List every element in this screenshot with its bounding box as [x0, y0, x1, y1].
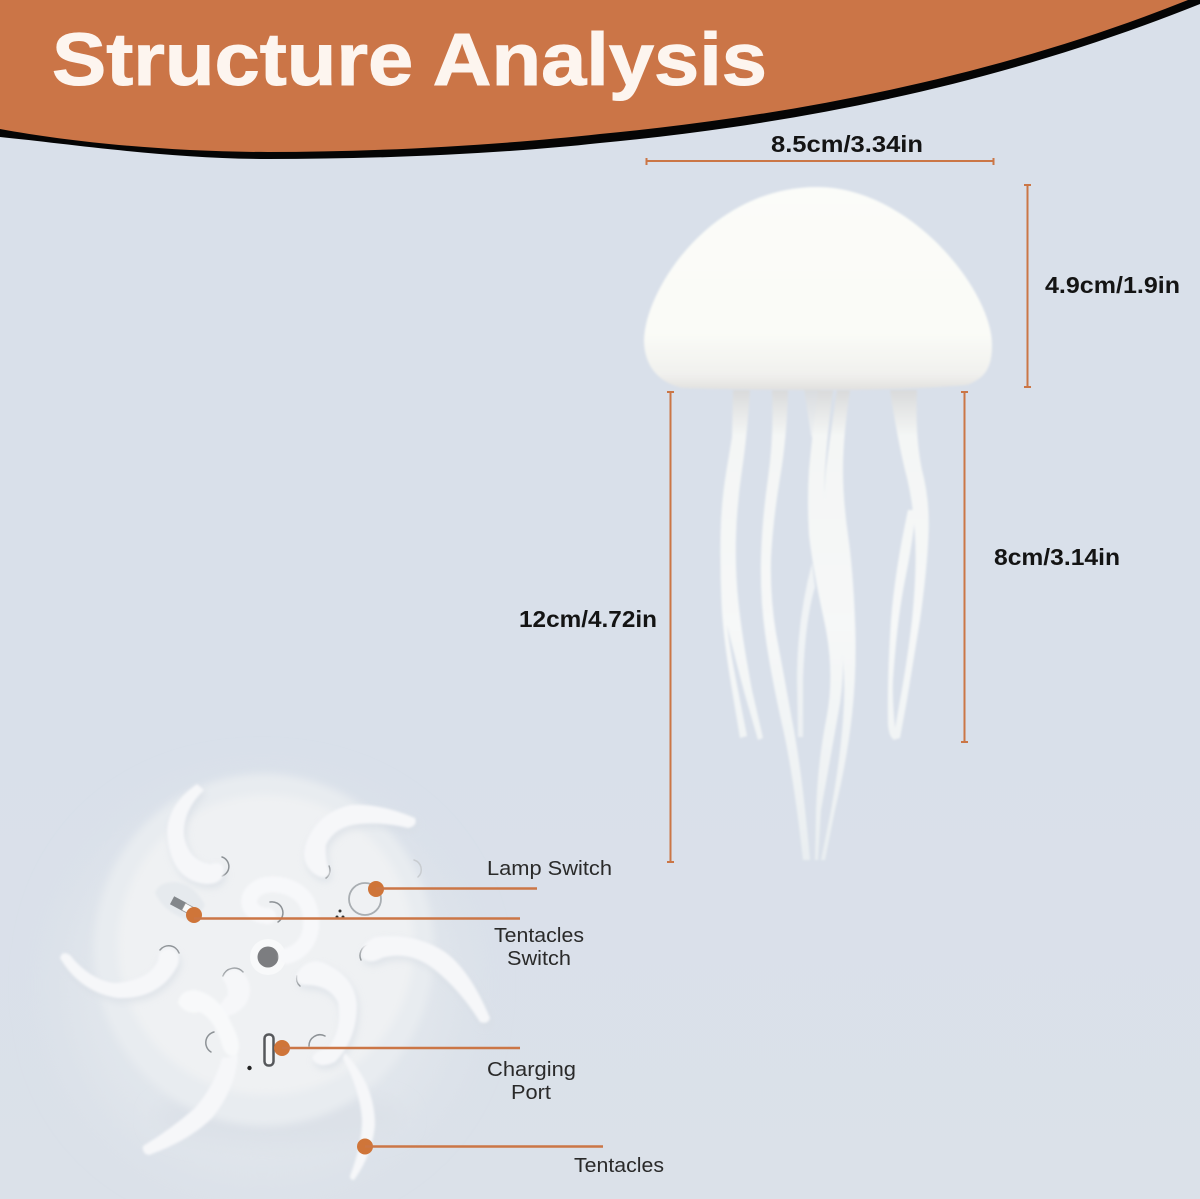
callout: lamp switch: Lamp Switch [487, 858, 612, 880]
short tentacle dimension: 8cm: 8cm/3.14in [994, 544, 1120, 570]
callout: charging port: Port [511, 1082, 551, 1104]
callout: tentacles switch: Tentacles [494, 925, 584, 947]
callout: tentacles switch [186, 907, 584, 970]
jellyfish dome [644, 187, 992, 390]
underside tentacles [60, 784, 490, 1180]
callout: lamp switch [368, 858, 612, 897]
callout: charging port: Charging [487, 1059, 576, 1081]
underside view of lamp [60, 774, 492, 1180]
callout: tentacles [357, 1138, 664, 1177]
short tentacle dimension: 8cm [961, 392, 1120, 742]
title: Structure Analysis [52, 18, 767, 101]
total length dimension: 12cm [519, 392, 674, 862]
callout: charging port [274, 1040, 576, 1104]
header banner [0, 0, 1200, 159]
width dimension: 8.5cm: 8.5cm/3.34in [771, 131, 923, 157]
callout: tentacles switch: Switch [507, 948, 571, 970]
total length dimension: 12cm: 12cm/4.72in [519, 606, 657, 632]
dome height dimension: 4.9cm [1024, 185, 1180, 387]
jellyfish tentacles [720, 388, 929, 860]
tentacle drop shadows [62, 788, 492, 1069]
callout: tentacles: Tentacles [574, 1155, 664, 1177]
width dimension: 8.5cm [646, 131, 994, 165]
jellyfish lamp illustration [644, 187, 992, 860]
underside disc [94, 774, 434, 1146]
dome height dimension: 4.9cm: 4.9cm/1.9in [1045, 272, 1180, 298]
switch and port details [160, 857, 421, 1070]
